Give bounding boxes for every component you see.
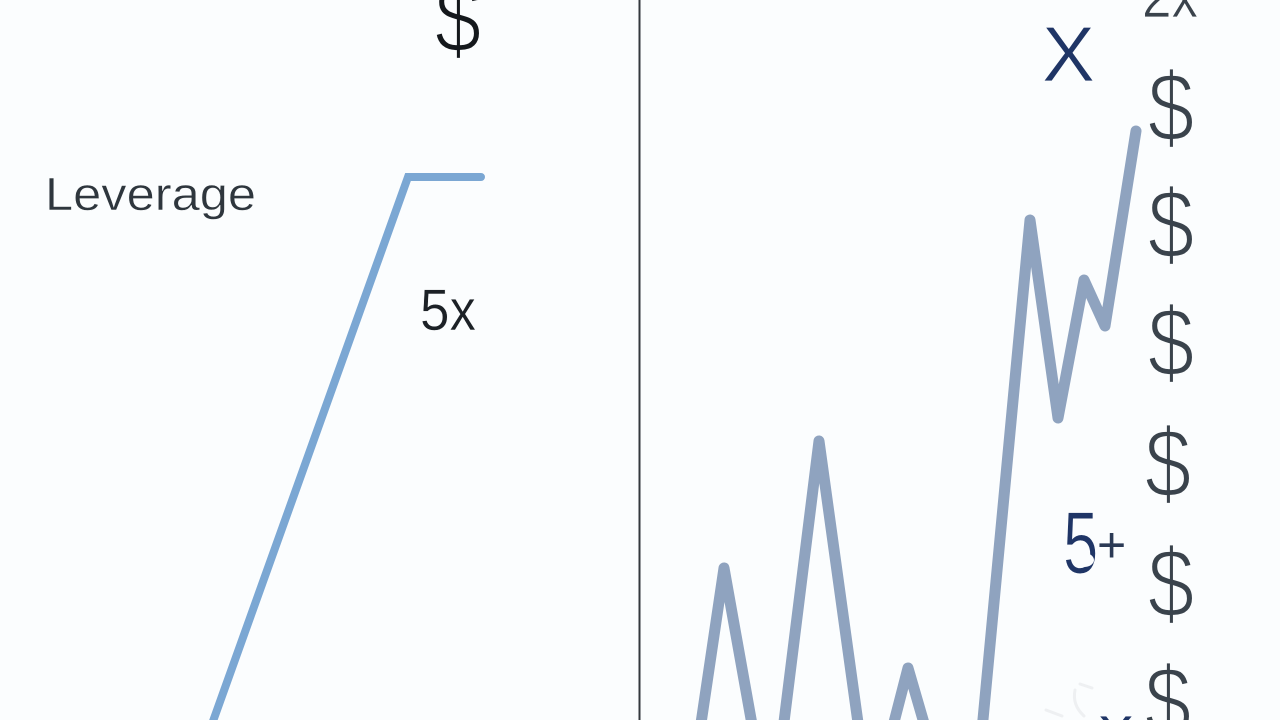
smudge above bottom x (1046, 684, 1092, 716)
label: 5x: 5x (420, 278, 476, 343)
column of dollar signs (1145, 53, 1194, 720)
panel: right volatile chart (700, 0, 1198, 720)
dollar sign 2: $ (1148, 170, 1194, 280)
digit 5: 5 (1063, 495, 1098, 593)
plus sign: + (1097, 517, 1126, 573)
leverage line (212, 177, 481, 720)
smudge over digit 5 (1074, 553, 1094, 567)
dollar sign 5: $ (1148, 529, 1194, 639)
label: X: X (1042, 10, 1095, 98)
dollar sign 1: $ (1148, 53, 1194, 163)
panel: left leverage chart (45, 0, 481, 720)
label: Leverage: Leverage (45, 168, 256, 220)
dollar sign 3: $ (1148, 288, 1194, 398)
label: 5+ (1063, 495, 1126, 593)
dollar sign 4: $ (1145, 409, 1191, 519)
volatile price line (700, 131, 1136, 720)
divider line (638, 0, 640, 720)
